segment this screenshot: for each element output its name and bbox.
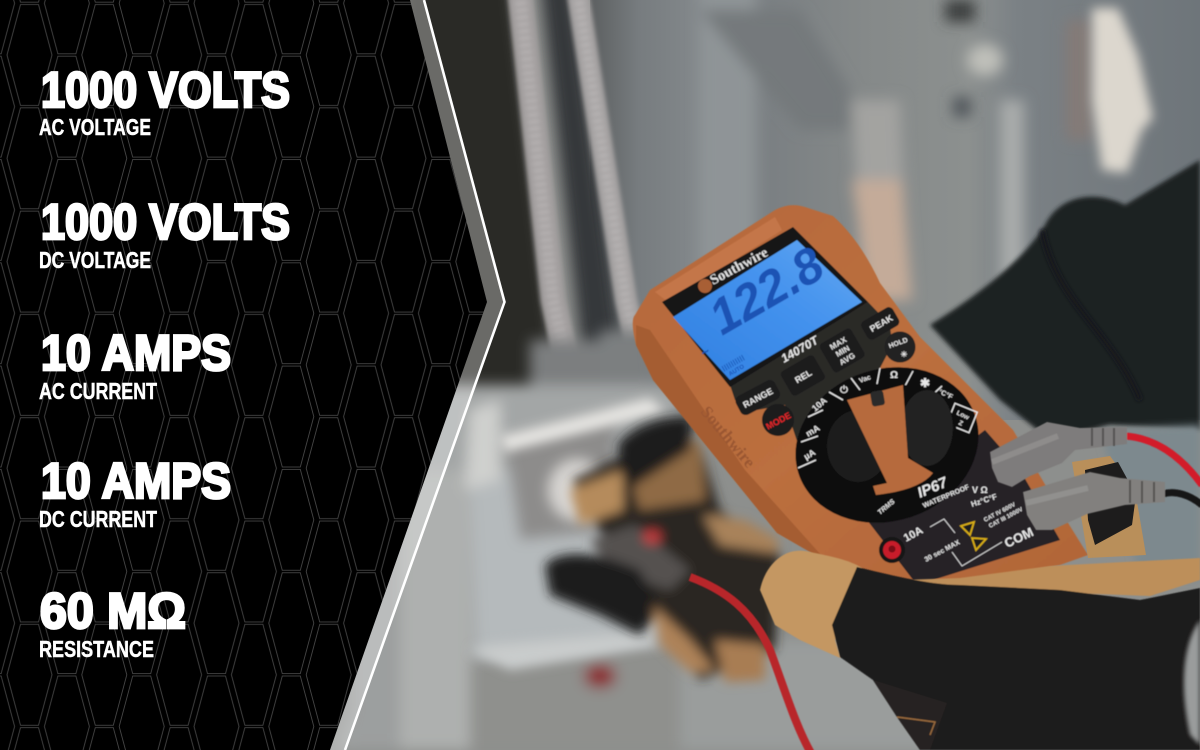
- black spec panel: [0, 0, 487, 750]
- button: MAX MIN AVG: AVG: [838, 351, 857, 367]
- red jack: [879, 537, 905, 563]
- button: MAX MIN AVG: [818, 327, 866, 374]
- brand on bezel: 14070T: [778, 332, 822, 366]
- dial ring: [775, 344, 999, 546]
- spec: 10 amps AC current: [39, 324, 231, 404]
- button: MAX MIN AVG: MIN: [834, 344, 852, 359]
- glove tan thumb pad: [760, 551, 862, 658]
- spec: 10 amps AC current: 10 AMPS: [41, 324, 231, 381]
- function labels: Z: [957, 420, 964, 428]
- spec: 1000 volts AC voltage: AC VOLTAGE: [39, 114, 151, 140]
- jack panel labels: 10A: [902, 525, 925, 545]
- translucent chevron band: [330, 0, 504, 750]
- spec: 1000 volts DC voltage: DC VOLTAGE: [39, 247, 151, 273]
- function labels: Ω: [890, 370, 898, 381]
- spec: 1000 volts DC voltage: 1000 VOLTS: [41, 193, 290, 250]
- function labels: ⏻: [840, 384, 848, 396]
- warning triangles: [961, 522, 986, 550]
- glove black fabric: [832, 567, 1200, 750]
- spec: 10 amps AC current: AC CURRENT: [39, 378, 157, 404]
- spec: 1000 volts DC voltage: [39, 193, 290, 273]
- spec: 10 amps DC current: DC CURRENT: [39, 506, 157, 532]
- function labels: µA: [802, 447, 818, 462]
- spec: 60 megaohm resistance: [39, 582, 186, 662]
- spec: 1000 volts AC voltage: [39, 61, 290, 140]
- spec: 10 amps DC current: [39, 452, 231, 532]
- LCD reading: 122.8: [700, 236, 833, 346]
- LCD small indicators: ~: [698, 343, 713, 361]
- multimeter: [633, 205, 1088, 590]
- button: REL: REL: [793, 367, 814, 385]
- meter body: [633, 205, 1088, 590]
- embossed side lettering: Southwire: [697, 402, 760, 472]
- jack panel labels: V Ω: [972, 485, 988, 495]
- LCD small indicators: AUTO: [728, 364, 746, 378]
- button: RANGE: RANGE: [741, 386, 775, 410]
- glove tan strip: [900, 558, 1200, 596]
- foreground gloved hand: [760, 551, 1200, 750]
- right hand finger behind leads: [1072, 456, 1146, 558]
- lower grey plug: [1023, 472, 1165, 530]
- meter side lip: [636, 325, 830, 565]
- jack panel labels: [902, 485, 1036, 566]
- function labels: °C°F: [937, 388, 955, 401]
- button: HOLD: ✳: [901, 350, 908, 359]
- background hand holding test leads: [545, 417, 780, 682]
- button: MODE: [762, 404, 794, 436]
- button: MODE: MODE: [764, 410, 793, 432]
- button: REL: [779, 354, 826, 397]
- IP67 badge text: TRMS: [877, 498, 897, 517]
- dial knob: [813, 374, 965, 500]
- red lead: [1125, 436, 1200, 485]
- brand on bezel: Southwire: [707, 244, 771, 289]
- spec: 60 megaohm resistance: RESISTANCE: [39, 636, 154, 662]
- LCD small indicators: [698, 343, 746, 378]
- black lead: [1163, 493, 1200, 505]
- upper grey plug: [990, 422, 1127, 487]
- jack panel labels: CAT III 1000V: [988, 507, 1024, 530]
- IP67 badge text: WATERPROOF: [922, 484, 971, 510]
- function labels: 10A: [810, 395, 829, 414]
- function labels: ✱: [920, 376, 930, 390]
- jacket sleeve: [930, 160, 1200, 580]
- jack panel labels: Hz°C°F: [970, 492, 998, 509]
- junction box: [340, 330, 960, 750]
- button: PEAK: PEAK: [868, 313, 895, 334]
- jack panel labels: 30 sec MAX: [924, 539, 962, 564]
- button: RANGE: [733, 378, 782, 417]
- button: PEAK: [859, 305, 901, 342]
- black button plate: [730, 302, 892, 450]
- photo: blurred workshop background: [330, 0, 1200, 750]
- button: MAX MIN AVG: MAX: [828, 335, 849, 352]
- black jack panel: [867, 430, 1060, 585]
- grey sleeve edge: [1184, 620, 1200, 745]
- IP67 badge text: IP67: [915, 474, 951, 502]
- jack panel labels: CAT IV 600V: [983, 502, 1017, 524]
- spec: 1000 volts AC voltage: 1000 VOLTS: [41, 61, 290, 118]
- function labels: Low: [955, 410, 971, 422]
- function labels: mA: [804, 423, 822, 439]
- IP67 badge text: [877, 474, 971, 517]
- brand on bezel: [698, 244, 822, 366]
- display bezel: [662, 227, 868, 387]
- function labels: Vac: [858, 374, 872, 385]
- button: HOLD: HOLD: [888, 337, 909, 350]
- rotary dial: [775, 344, 999, 546]
- white chevron line: [345, 0, 504, 750]
- spec: 60 megaohm resistance: 60 MΩ: [40, 582, 186, 639]
- knob pointer: [847, 385, 933, 495]
- conduit cables: [520, 0, 635, 360]
- red test lead, lower: [690, 577, 812, 750]
- test lead plugs: [990, 422, 1200, 530]
- spec: 10 amps DC current: 10 AMPS: [41, 452, 231, 509]
- button: HOLD: [884, 332, 916, 362]
- jack panel labels: COM: [1002, 524, 1036, 551]
- LCD screen: [673, 240, 862, 380]
- function labels: [798, 368, 977, 468]
